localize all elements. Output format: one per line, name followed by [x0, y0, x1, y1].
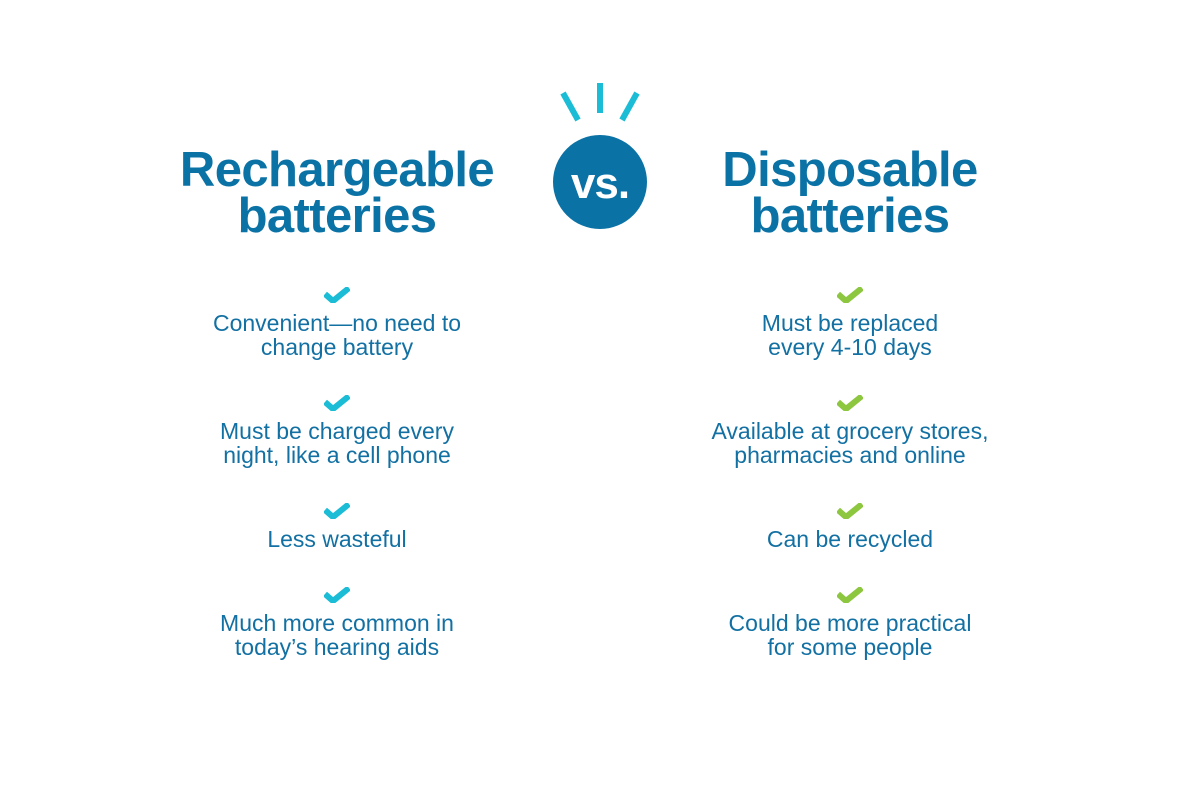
title: rechargeable — [180, 143, 494, 243]
item: disposable 1: Must be replaced — [762, 310, 938, 336]
title: disposable: batteries — [751, 189, 949, 243]
item: disposable 3: Can be recycled — [767, 526, 933, 552]
item: disposable 1 — [762, 287, 938, 360]
item: rechargeable 4: Much more common in — [220, 610, 454, 636]
icon: vs badge with rays: vs. — [571, 159, 629, 208]
item: rechargeable 1: change battery — [261, 334, 413, 360]
item: rechargeable 4: today’s hearing aids — [235, 634, 439, 660]
item: rechargeable 3: Less wasteful — [267, 526, 407, 552]
item: disposable 2: pharmacies and online — [734, 442, 966, 468]
title: disposable: Disposable — [722, 143, 978, 197]
item: disposable 4: Could be more practical — [729, 610, 971, 636]
item: rechargeable 2: night, like a cell phone — [223, 442, 451, 468]
item: disposable 3 — [767, 503, 933, 552]
title: rechargeable: batteries — [238, 189, 436, 243]
item: disposable 2 — [712, 395, 988, 468]
icon: vs badge with rays — [553, 83, 647, 229]
item: rechargeable 1 — [213, 287, 461, 360]
item: disposable 1: every 4-10 days — [768, 334, 932, 360]
item: rechargeable 1: Convenient—no need to — [213, 310, 461, 336]
title: rechargeable: Rechargeable — [180, 143, 494, 197]
item: rechargeable 2: Must be charged every — [220, 418, 454, 444]
title: disposable — [722, 143, 978, 243]
item: rechargeable 4 — [220, 587, 454, 660]
item: disposable 4: for some people — [768, 634, 932, 660]
item: disposable 2: Available at grocery stores, — [712, 418, 988, 444]
item: disposable 4 — [729, 587, 971, 660]
item: rechargeable 3 — [267, 503, 407, 552]
item: rechargeable 2 — [220, 395, 454, 468]
